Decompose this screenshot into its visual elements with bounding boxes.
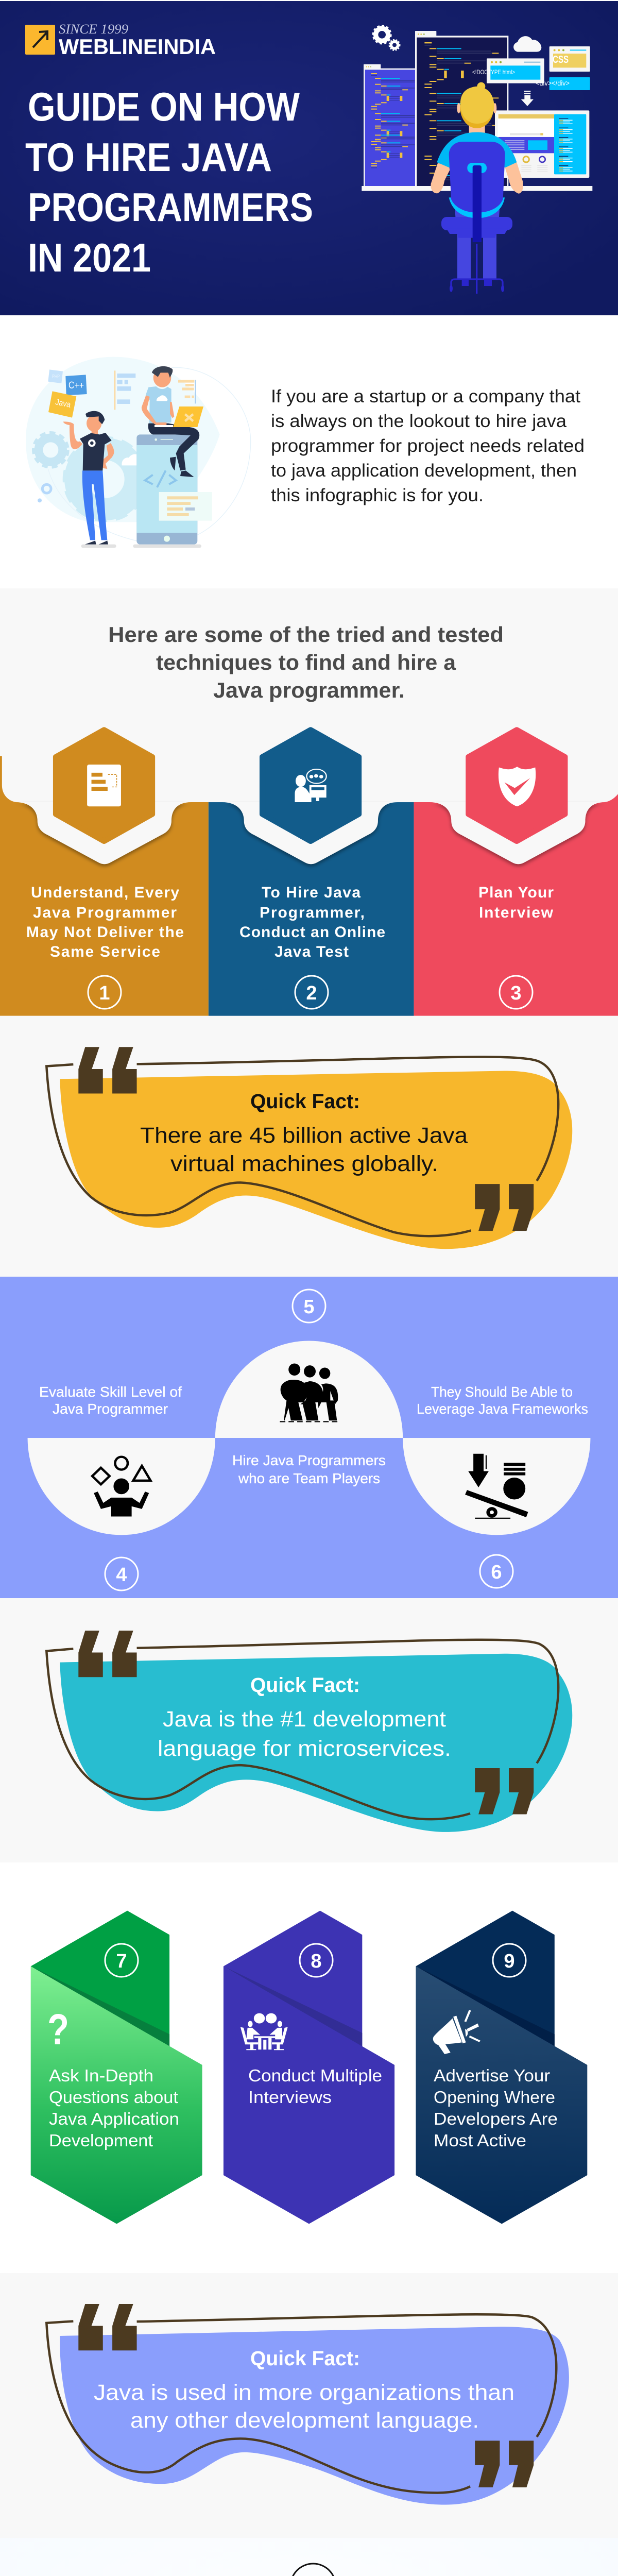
step 1 text: Java Programmer <box>33 904 177 921</box>
hexagon 8 <box>224 1911 394 2224</box>
text: leverage frameworks: They Should Be Able to <box>431 1384 573 1400</box>
code charts floating <box>114 370 196 410</box>
heading: tried and tested techniques: Java programmer. <box>213 678 405 702</box>
card labels: Java <box>55 398 72 410</box>
panel: steps 4 to 6 <box>0 1277 618 1598</box>
step 7 text <box>49 2066 179 2150</box>
hexagon 9 <box>416 1911 587 2224</box>
phone <box>136 434 212 545</box>
icon: megaphone <box>433 2010 480 2054</box>
illustration labels: <!DOCTYPE html> <box>472 69 515 76</box>
intro text: is always on the lookout to hire java <box>271 411 567 431</box>
step 2 text: Java Test <box>274 943 349 960</box>
heading: tried and tested techniques <box>108 622 504 702</box>
language cards <box>48 369 87 418</box>
title <box>25 84 313 280</box>
callout: quick fact 2 <box>46 1631 572 1832</box>
title: PROGRAMMERS <box>28 184 313 230</box>
number 4 <box>105 1557 138 1590</box>
icon: gears <box>373 26 400 50</box>
number 1 <box>88 976 121 1009</box>
number 1: 1 <box>99 982 110 1004</box>
heading: tried and tested techniques: techniques to find and hire a <box>156 650 456 674</box>
standing developer <box>63 411 114 545</box>
number 2: 2 <box>306 982 317 1004</box>
text: team players <box>232 1452 386 1486</box>
number 4: 4 <box>116 1564 127 1586</box>
illustration: two developers with phone <box>26 357 251 548</box>
step 3 text: Interview <box>479 904 554 921</box>
illustration labels: CSS <box>553 54 569 65</box>
intro text: programmer for project needs related <box>271 436 585 456</box>
callout: quick fact 1: virtual machines globally. <box>170 1151 438 1176</box>
step 1 text: May Not Deliver the <box>26 924 184 941</box>
callout: quick fact 3: Java is used in more organizations than <box>94 2380 514 2405</box>
div box <box>550 77 590 90</box>
intro text: this infographic is for you. <box>271 485 484 505</box>
step 7 text: Development <box>49 2131 153 2150</box>
icon: down arrow <box>521 91 534 106</box>
intro text <box>271 386 585 505</box>
hexagon 1 <box>56 730 152 841</box>
panel: steps 7 to 9 <box>31 1911 587 2224</box>
card labels <box>52 374 84 410</box>
number 9: 9 <box>504 1951 515 1972</box>
icon: document <box>87 765 121 806</box>
illustration: developer at code screens <box>362 26 592 294</box>
logo: Weblineindia: WEBLINEINDIA <box>59 35 216 59</box>
callout: quick fact 3 <box>46 2304 569 2505</box>
intro text: If you are a startup or a company that <box>271 386 580 406</box>
illustration labels <box>472 54 570 87</box>
text: leverage frameworks: Leverage Java Frameworks <box>417 1401 588 1417</box>
callout: quick fact 1 <box>46 1047 572 1249</box>
title: IN 2021 <box>28 235 151 280</box>
title: TO HIRE JAVA <box>25 134 272 180</box>
icon: team <box>280 1363 339 1421</box>
number 7 <box>105 1944 138 1977</box>
step bands <box>0 756 618 1016</box>
callout: quick fact 2: Quick Fact: <box>250 1674 360 1697</box>
text: evaluate skill: Java Programmer <box>53 1401 168 1417</box>
panel: create new avenues <box>0 2538 618 2576</box>
icon: shield check <box>499 767 536 806</box>
number 3 <box>500 976 533 1009</box>
heading: tried and tested techniques: Here are some of the tried and tested <box>108 622 504 647</box>
desk <box>362 186 592 191</box>
intro text: to java application development, then <box>271 461 577 481</box>
number 3: 3 <box>510 982 522 1004</box>
icon: question mark: ? <box>47 2005 69 2054</box>
step 8 text <box>248 2066 382 2107</box>
panel: hero header <box>0 1 618 315</box>
text: team players: Hire Java Programmers <box>232 1452 386 1468</box>
step 3 text: Plan Your <box>478 884 554 901</box>
hexagon 3 <box>469 730 565 841</box>
sitting developer <box>142 366 203 477</box>
step 7 text: Questions about <box>49 2088 178 2107</box>
semicircles <box>28 1341 590 1535</box>
css window <box>550 46 590 72</box>
step 1 text: Same Service <box>50 943 160 960</box>
card labels: PHP <box>52 374 60 380</box>
step 2 text: Programmer, <box>260 904 365 921</box>
callout: quick fact 3: any other development language. <box>130 2408 479 2433</box>
step 7 text: Ask In-Depth <box>49 2066 153 2085</box>
step 2 text: To Hire Java <box>262 884 360 901</box>
step 8 text: Interviews <box>248 2088 332 2107</box>
text: evaluate skill <box>39 1384 182 1417</box>
step 9 text: Advertise Your <box>434 2066 550 2085</box>
step 1 text: Understand, Every <box>31 884 179 901</box>
icon: meeting <box>241 2013 288 2050</box>
panel: introduction <box>26 357 585 548</box>
number 8: 8 <box>311 1951 322 1972</box>
number 7: 7 <box>116 1951 127 1972</box>
card labels: C++ <box>68 380 84 391</box>
number 8 <box>300 1944 333 1977</box>
text: leverage frameworks <box>417 1384 588 1417</box>
callout: quick fact 3: Quick Fact: <box>250 2347 360 2370</box>
number 6 <box>480 1555 513 1588</box>
text: team players: who are Team Players <box>238 1470 380 1486</box>
step 9 text <box>434 2066 558 2150</box>
number 5: 5 <box>303 1296 315 1318</box>
panel: steps 1 to 3 <box>0 730 618 1016</box>
hexagon notches <box>16 802 605 864</box>
icon: person at computer <box>295 769 327 802</box>
logo: Weblineindia: SINCE 1999 <box>59 22 128 37</box>
title: GUIDE ON HOW <box>28 84 300 129</box>
text: evaluate skill: Evaluate Skill Level of <box>39 1384 182 1400</box>
icon: seesaw with Java <box>465 1454 528 1519</box>
number 6: 6 <box>491 1562 502 1583</box>
laptop screen <box>495 110 589 178</box>
hexagon 2 <box>263 730 358 841</box>
step 7 text: Java Application <box>49 2109 179 2128</box>
number 2 <box>295 976 328 1009</box>
logo: Weblineindia <box>25 22 216 59</box>
step 9 text: Opening Where <box>434 2088 555 2107</box>
step 3 text <box>478 884 554 921</box>
step 2 text <box>239 884 385 960</box>
icon: juggler <box>92 1457 150 1517</box>
step 8 text: Conduct Multiple <box>248 2066 382 2085</box>
callout: quick fact 1: Quick Fact: <box>250 1090 360 1113</box>
step 1 text <box>26 884 184 960</box>
illustration labels: <div></div> <box>536 79 570 87</box>
number 9 <box>493 1944 526 1977</box>
icon: cloud <box>513 36 541 52</box>
number 5 <box>293 1290 325 1323</box>
step 2 text: Conduct an Online <box>239 924 385 941</box>
callout: quick fact 2: language for microservices. <box>158 1736 451 1761</box>
number 10 <box>290 2564 336 2576</box>
callout: quick fact 2: Java is the #1 development <box>163 1707 446 1732</box>
person on chair <box>431 82 523 294</box>
main code window <box>415 31 508 187</box>
step 9 text: Most Active <box>434 2131 526 2150</box>
callout: quick fact 1: There are 45 billion active Java <box>140 1123 468 1148</box>
html window <box>487 58 544 83</box>
left code window <box>364 64 416 187</box>
step 9 text: Developers Are <box>434 2109 558 2128</box>
hexagon 7 <box>31 1911 202 2224</box>
